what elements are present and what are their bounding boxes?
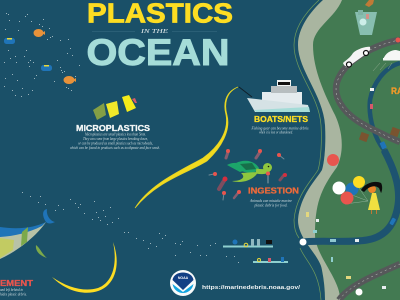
ingested plastics [209, 149, 287, 200]
land [298, 0, 400, 300]
text: microplastics: Microplastics are small plastics less than 5mm. [84, 132, 146, 136]
url: https://marinedebris.noaa.gov/ [202, 285, 301, 291]
text: ingestion: plastic debris for food. [254, 202, 288, 208]
yellow crescent [52, 242, 117, 293]
orange splash [365, 0, 374, 7]
heading: ingestion: INGESTION [248, 186, 299, 196]
fish: blue [41, 65, 52, 71]
text: microplastics [70, 132, 160, 150]
text: boats/nets: Fishing gear can become marine debris [251, 126, 309, 130]
boat [247, 80, 310, 112]
text: ingestion [249, 198, 292, 208]
road [336, 40, 400, 300]
text: boats/nets: when it is lost or abandoned. [259, 130, 293, 134]
microplastics icon [93, 95, 137, 120]
glass of trash [355, 10, 377, 35]
whale tail net [0, 209, 55, 259]
heading: entanglement: EMENT [0, 279, 33, 288]
text: microplastics: They can come from large plastics breaking down, [83, 136, 148, 142]
heading: microplastics: MICROPLASTICS [76, 123, 150, 133]
heading: boats/nets: BOATS/NETS [254, 115, 309, 124]
text: entanglement [0, 287, 27, 296]
fishing rod [239, 87, 252, 97]
beach [298, 0, 342, 300]
text: ingestion: Animals can mistake marine [249, 198, 292, 203]
cloud [383, 50, 400, 60]
crates [359, 127, 400, 142]
fish: orange [34, 29, 45, 37]
NOAA logo [170, 270, 196, 296]
text: entanglement: hides plastic debris. [0, 292, 27, 296]
car [343, 47, 370, 67]
dots on road and river [300, 38, 400, 296]
rain lines [373, 63, 392, 71]
shoreline stroke [294, 0, 321, 300]
NOAA logo: NOAA [178, 276, 189, 280]
text: microplastics: or can be produced as small plastics such as microbeads, [78, 140, 153, 146]
fish: orange [64, 76, 76, 84]
particle clouds [4, 13, 239, 263]
balloon girl [361, 182, 382, 214]
text: boats/nets [251, 126, 309, 134]
text: microplastics: which can be found in products such as toothpaste and face wash. [70, 145, 160, 150]
fish: blue [4, 38, 15, 44]
balloons [332, 176, 365, 204]
title: IN THE [140, 28, 168, 35]
text: entanglement: and left behind in [0, 287, 23, 292]
title [86, 0, 233, 73]
seabed debris lower [253, 257, 288, 263]
turtle [227, 161, 272, 182]
seabed debris upper [223, 239, 273, 248]
balloon strings [345, 188, 368, 204]
title: OCEAN [86, 32, 230, 73]
river [303, 63, 400, 242]
fishing line and yellow swoosh [135, 87, 238, 208]
